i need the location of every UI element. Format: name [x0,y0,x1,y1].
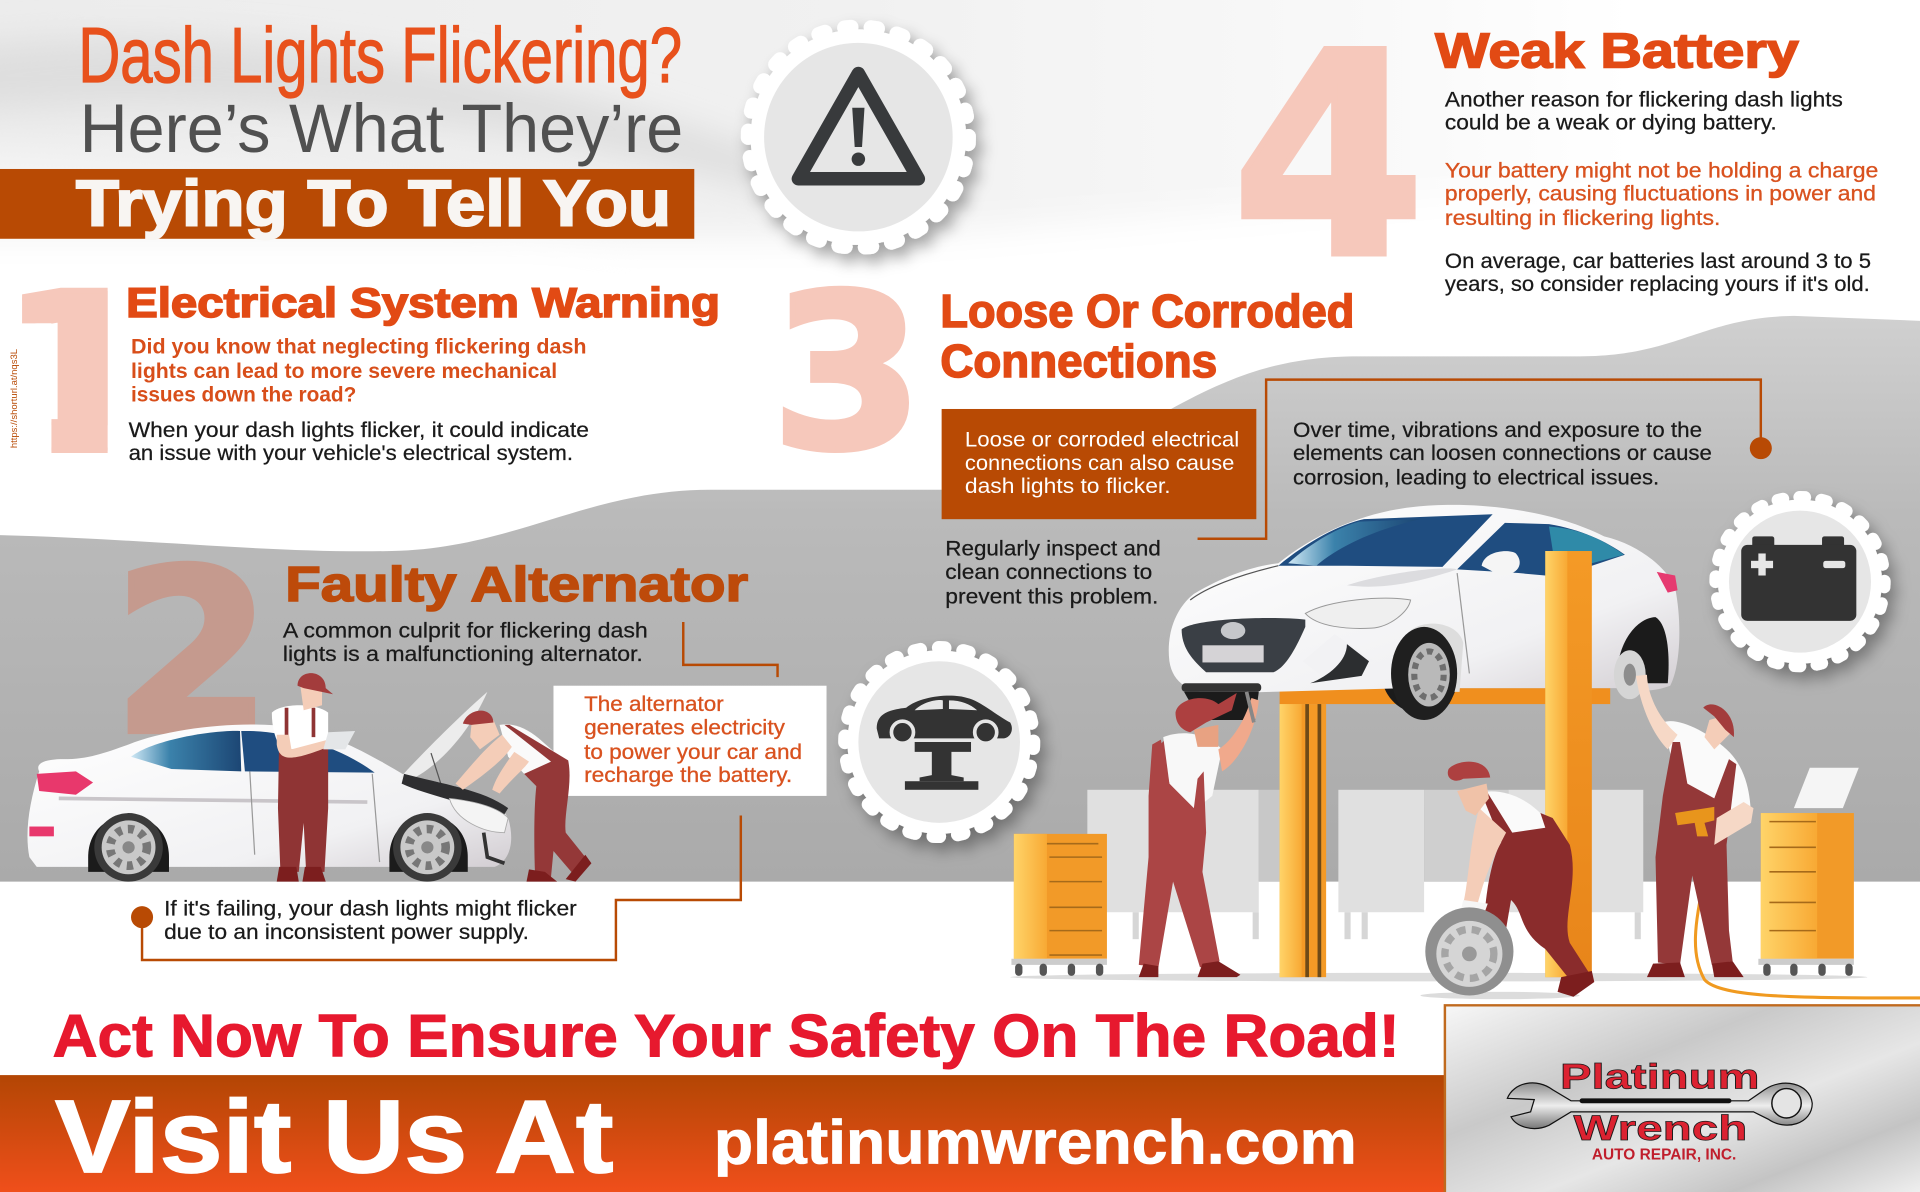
illustration: mechanic under car [1139,692,1259,977]
callout box: connections can also cause [965,452,1234,475]
illustration: right tool cabinet and laptop [1758,768,1859,976]
title line 2: Here’s What They’re [80,90,683,167]
heading 3: Connections [940,335,1217,387]
callout: alternator: recharge the battery. [584,764,792,787]
title block [0,11,694,239]
illustration: lift rear post and arm [1280,688,1610,977]
failing text: If it's failing, your dash lights might flicker [164,898,577,921]
battery text 2 [1445,159,1878,230]
battery text 1: could be a weak or dying battery. [1445,112,1777,135]
heading 1: Electrical System Warning [126,279,720,326]
panel: 3 loose or corroded connections [771,250,1772,608]
inspect text: prevent this problem. [945,585,1158,608]
panel: 1 electrical system warning [0,248,720,503]
callout: alternator [553,686,827,796]
workshop floor and back cabinets [0,790,1920,999]
callout box: Loose or corroded electrical [965,429,1239,452]
illustration: mechanic with tablet [272,673,355,882]
connector with dot [131,816,741,960]
body text: When your dash lights flicker, it could indicate [129,419,589,442]
intro text: lights is a malfunctioning alternator. [283,643,643,666]
illustration: white car on lift [1169,505,1679,720]
battery text 2: resulting in flickering lights. [1445,207,1720,230]
body text: an issue with your vehicle's electrical system. [129,442,573,465]
highlighted question: issues down the road? [131,383,356,406]
number 2: 2 [113,523,272,785]
failing text [164,898,577,944]
title line 3: Trying To Tell You [76,166,671,239]
battery text 3 [1445,250,1871,296]
intro text: A common culprit for flickering dash [283,620,648,643]
footer band [0,1075,1445,1192]
icon: battery gear [1716,497,1884,666]
icon: car lift gear [845,648,1033,836]
failing text: due to an inconsistent power supply. [164,921,529,944]
intro text [283,620,648,666]
inspect text: Regularly inspect and [945,538,1161,561]
logo wordmark: Wrench [1573,1108,1747,1148]
vibrations text: corrosion, leading to electrical issues. [1293,467,1659,490]
callout box [942,409,1256,519]
heading 3 [940,285,1354,387]
battery text 3: On average, car batteries last around 3 to 5 [1445,250,1871,273]
connector [683,622,778,677]
gray wave background [0,316,1920,883]
number 3: 3 [771,250,923,498]
icon: wrench [1507,1083,1812,1129]
battery text 2: properly, causing fluctuations in power and [1445,183,1876,206]
callout: alternator: generates electricity [584,716,786,739]
logo wordmark [1560,1057,1760,1164]
heading 2: Faulty Alternator [285,558,748,612]
vibrations text: elements can loosen connections or cause [1293,442,1712,465]
vibrations text: Over time, vibrations and exposure to the [1293,419,1702,442]
website: platinumwrench.com [714,1107,1357,1177]
title line 1: Dash Lights Flickering? [78,11,682,99]
call to action: Act Now To Ensure Your Safety On The Road! [53,1003,1400,1070]
battery text 3: years, so consider replacing yours if it's old. [1445,273,1870,296]
illustration: left tool cabinet [1011,834,1107,976]
inspect text: clean connections to [945,561,1152,584]
number 4: 4 [1232,0,1425,320]
illustration: mechanic with drill and air hose [1636,675,1920,998]
battery text 1 [1445,88,1843,135]
highlighted question [131,336,587,406]
heading 4: Weak Battery [1435,24,1799,78]
icon: warning gear [748,27,969,247]
illustration: mechanic under hood [456,711,591,882]
panel: logo [1445,1005,1920,1192]
callout: alternator: to power your car and [584,741,802,764]
visit us at: Visit Us At [55,1079,613,1192]
logo wordmark: AUTO REPAIR, INC. [1592,1147,1736,1164]
connector with dot [1198,380,1772,539]
title band [0,169,694,239]
heading 3: Loose Or Corroded [940,285,1354,337]
callout: alternator: The alternator [584,693,724,716]
highlighted question: lights can lead to more severe mechanical [131,360,557,383]
small source url: https://shorturl.at/nqs3L [9,349,19,448]
illustration: mechanic with tyre [1425,762,1594,997]
body text [129,419,589,465]
vibrations text [1293,419,1712,490]
panel: 2 faulty alternator [113,523,827,960]
panel: 4 weak battery [1232,0,1878,320]
highlighted question: Did you know that neglecting flickering dash [131,336,587,359]
illustration: white car with raised hood [27,692,511,882]
callout box: dash lights to flicker. [965,475,1171,498]
battery text 1: Another reason for flickering dash lights [1445,88,1843,111]
illustration: lift front post [1545,551,1592,977]
battery text 2: Your battery might not be holding a charge [1445,159,1878,182]
logo wordmark: Platinum [1560,1057,1760,1097]
inspect text [945,538,1161,608]
